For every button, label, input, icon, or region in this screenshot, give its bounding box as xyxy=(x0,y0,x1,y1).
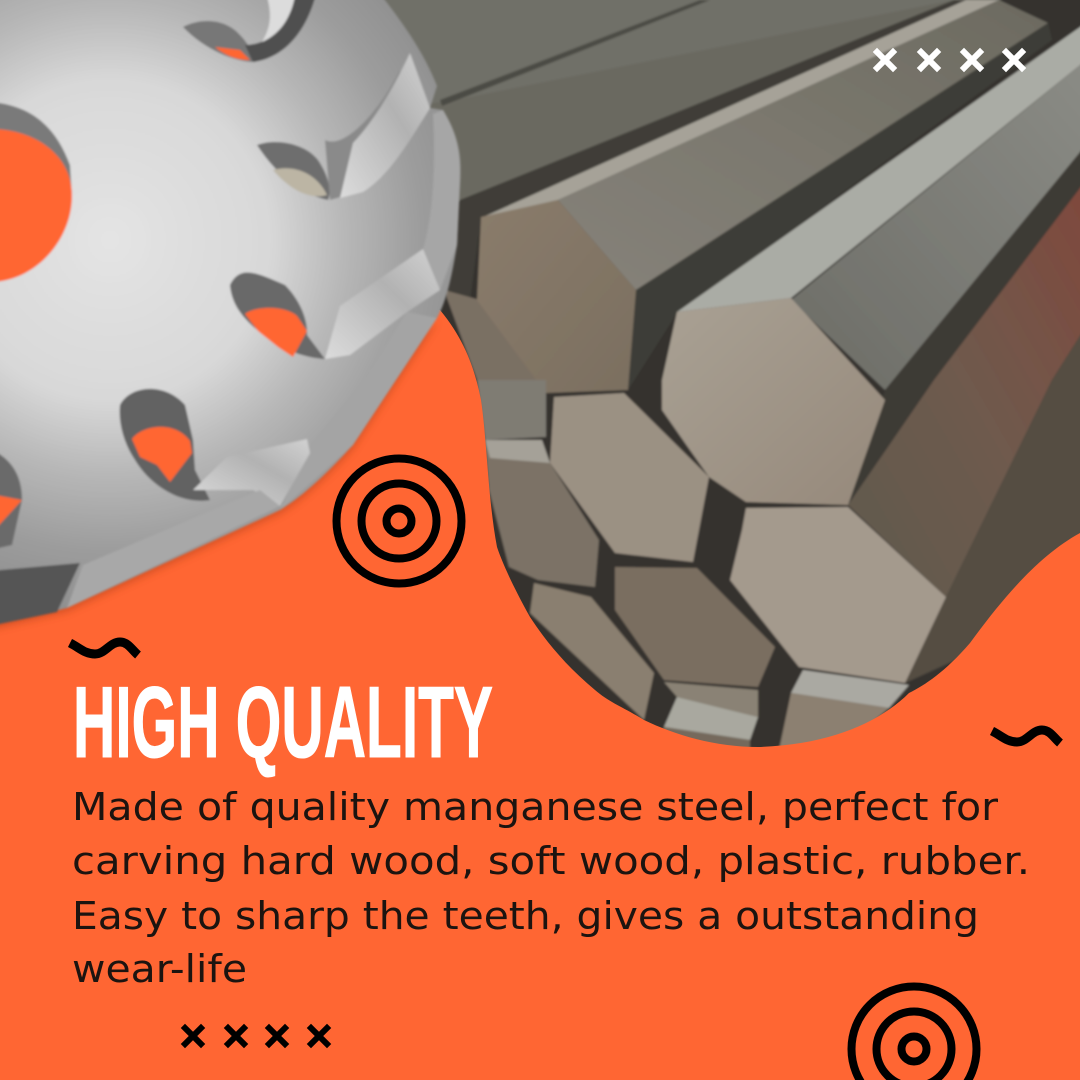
body text xyxy=(72,785,1030,991)
photo: round carving disc xyxy=(0,0,460,626)
body text: carving hard wood, soft wood, plastic, rubber. xyxy=(72,839,1030,883)
icon: target circle lower xyxy=(852,986,976,1080)
body text: Made of quality manganese steel, perfect for xyxy=(72,785,998,829)
icon: white crosses top right xyxy=(877,52,1022,68)
icon: squiggle left xyxy=(70,642,138,655)
icon: target circle upper xyxy=(336,458,462,584)
icon: black crosses bottom xyxy=(185,1028,327,1044)
body text: Easy to sharp the teeth, gives a outstanding xyxy=(72,894,979,938)
photo: hexagonal steel bars xyxy=(383,0,1080,747)
body text: wear-life xyxy=(72,947,247,991)
heading: HIGH QUALITY xyxy=(73,667,493,779)
icon: squiggle right xyxy=(992,730,1060,743)
drop shadow under disc xyxy=(0,322,437,630)
